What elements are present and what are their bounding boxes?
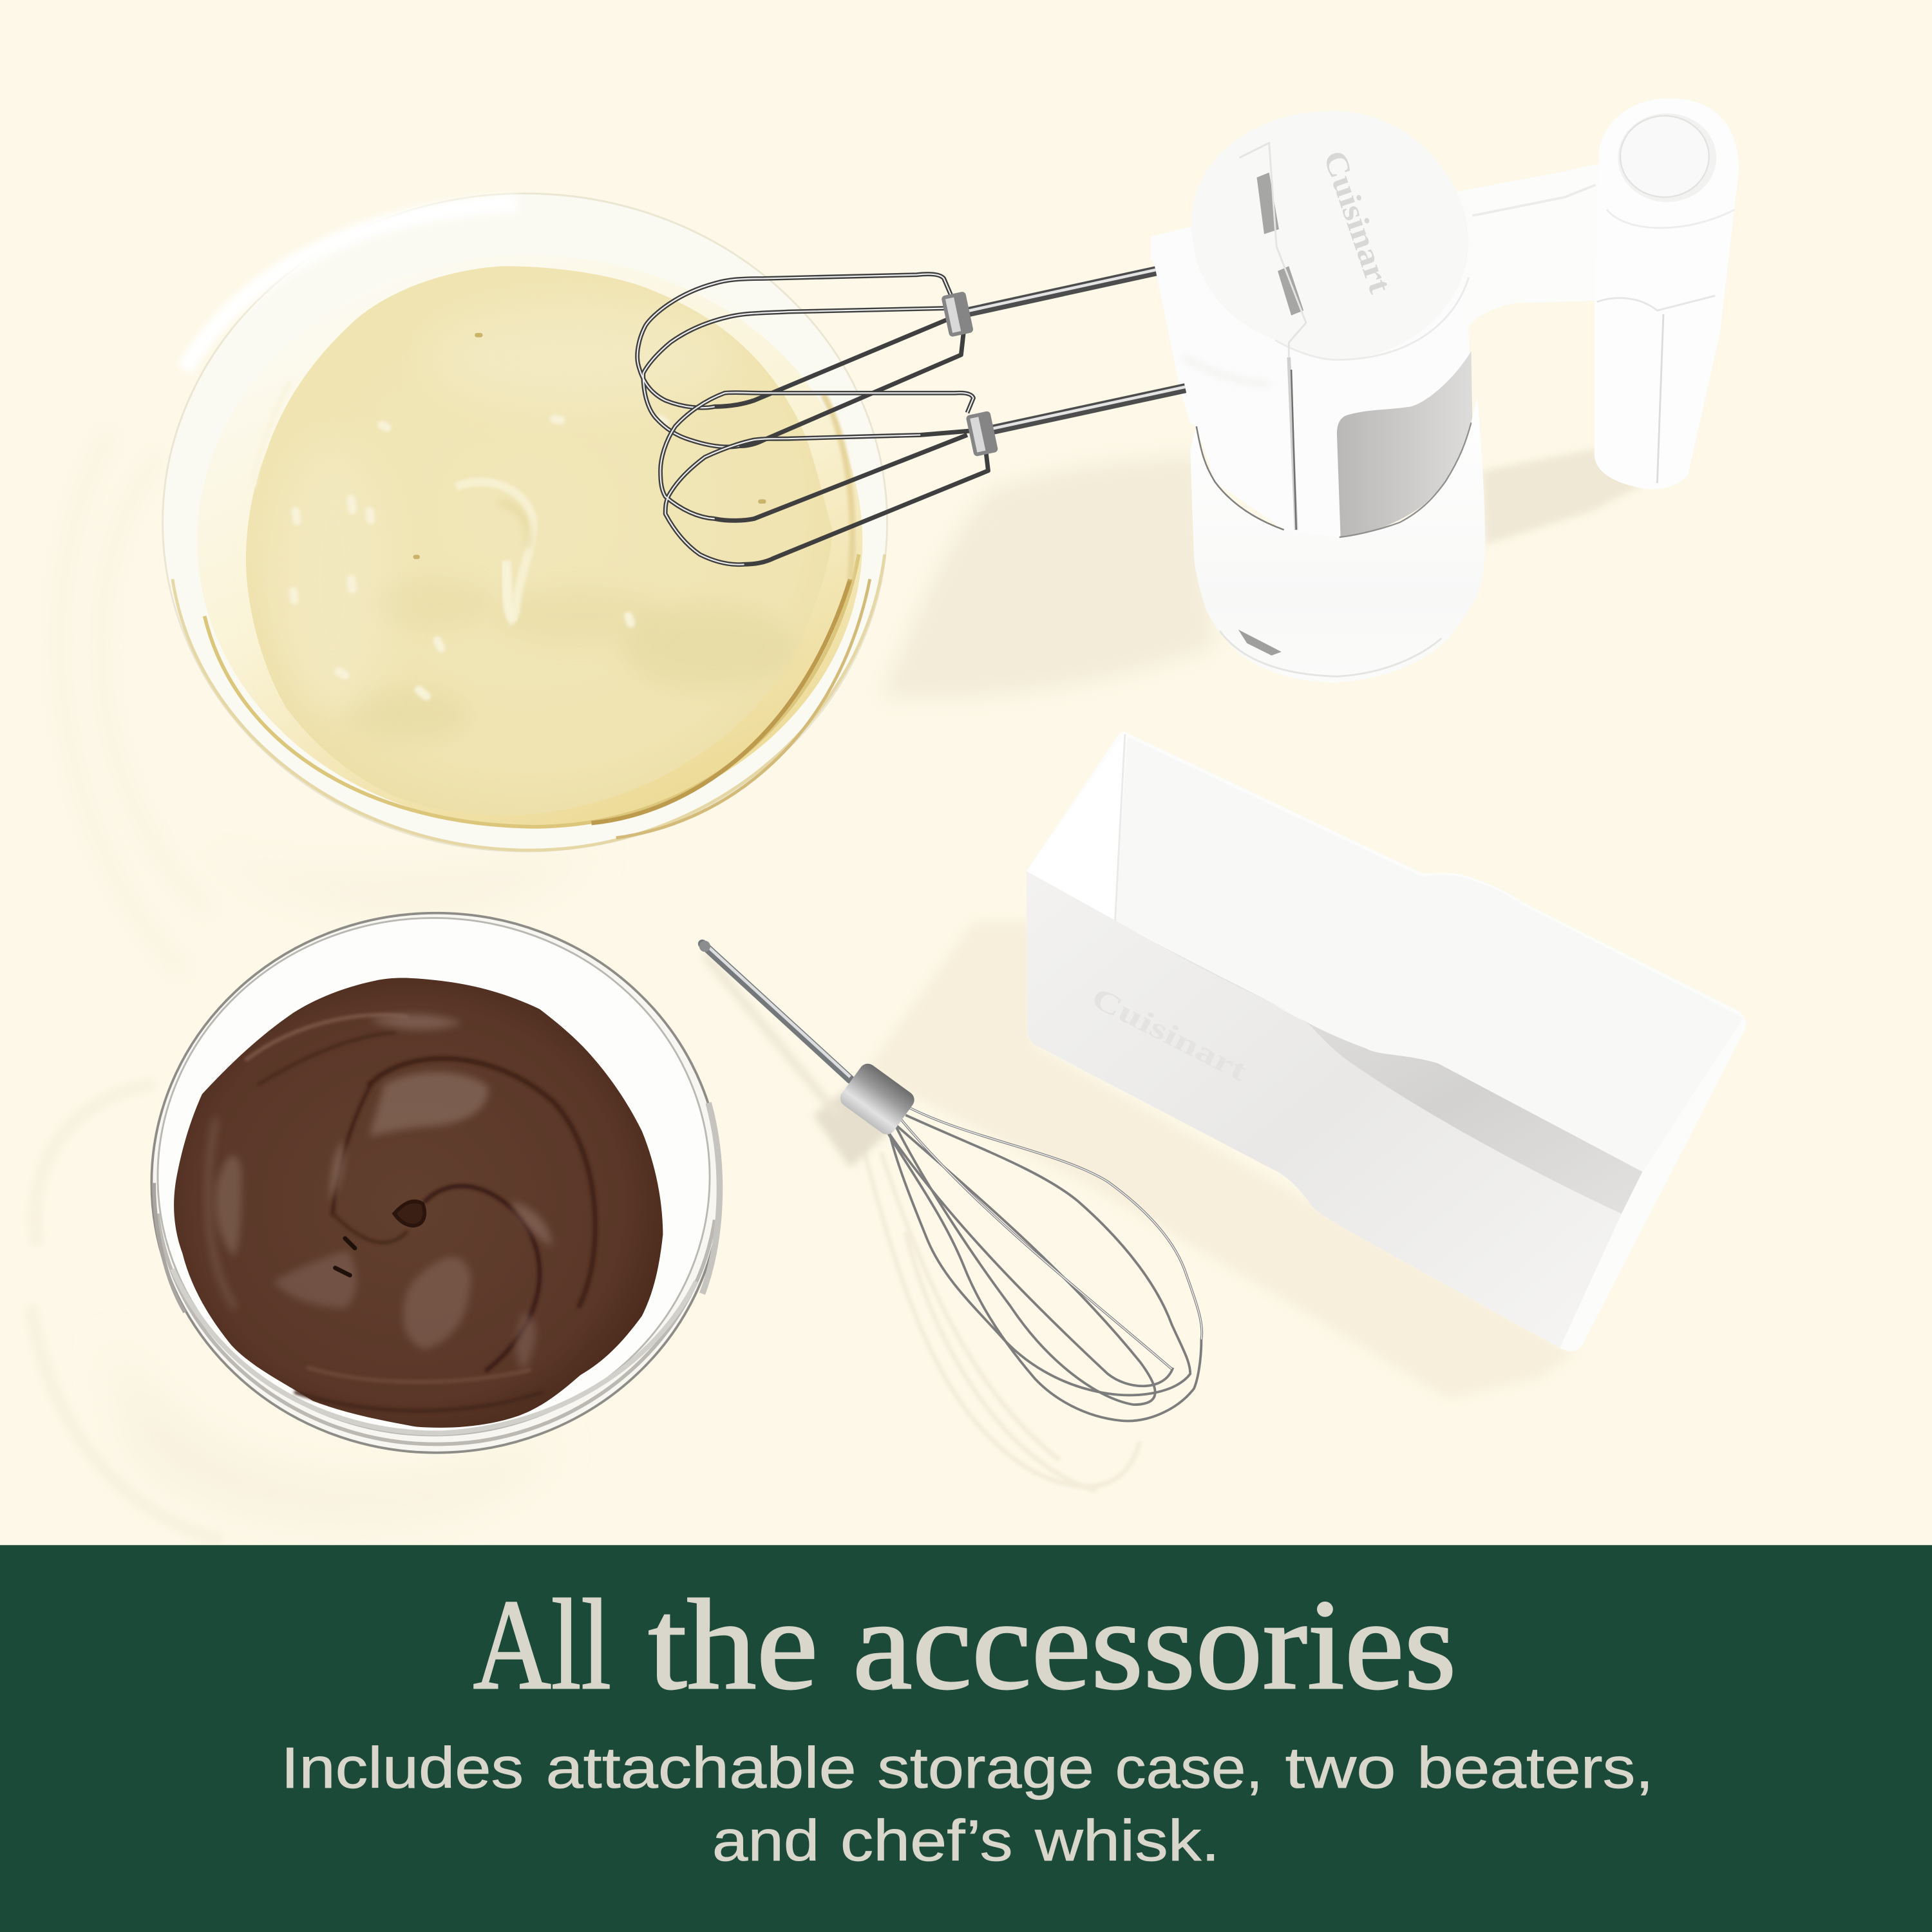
top disc bbox=[1191, 111, 1469, 360]
handle grip bbox=[1595, 99, 1739, 489]
chocolate swirls bbox=[208, 1015, 595, 1411]
inner glass well bbox=[197, 255, 862, 827]
description line 1: two bbox=[1285, 1736, 1396, 1801]
brand logo: Cuisinart bbox=[1316, 146, 1398, 298]
description line 1: beaters, bbox=[1417, 1736, 1654, 1801]
grey inner panel bbox=[1337, 351, 1472, 537]
attachment cup bbox=[1190, 397, 1485, 683]
description line 2: and bbox=[712, 1809, 819, 1873]
description line 1: attachable bbox=[546, 1736, 857, 1801]
amber ring lines bbox=[205, 554, 859, 827]
description line 2: whisk. bbox=[1034, 1809, 1220, 1873]
hand mixer bbox=[638, 99, 1739, 683]
glass bowl bbox=[151, 913, 721, 1453]
front face bbox=[1027, 871, 1622, 1348]
mixer body casing bbox=[1151, 227, 1471, 537]
interior side wall bbox=[1027, 732, 1125, 920]
chocolate surface bbox=[174, 978, 663, 1428]
whisk collar bbox=[837, 1060, 918, 1138]
body seam bbox=[1289, 357, 1296, 530]
glass bowl rim bbox=[163, 193, 887, 851]
handle arm bbox=[1454, 160, 1627, 333]
description line 2 bbox=[712, 1809, 1220, 1873]
batter swirl and tones bbox=[252, 308, 795, 742]
disc slots bbox=[1257, 173, 1279, 234]
bowl of chocolate batter bbox=[151, 913, 721, 1453]
description line 1: storage bbox=[877, 1736, 1094, 1801]
title: accessories bbox=[853, 1573, 1456, 1716]
footer band bbox=[0, 1545, 1932, 1932]
groove shadow bbox=[1151, 940, 1642, 1214]
storage case bbox=[1027, 732, 1746, 1351]
whisk shadow bbox=[862, 1146, 1140, 1491]
batter surface bbox=[246, 266, 833, 815]
whisk shaft bbox=[703, 944, 850, 1079]
whisk wires bbox=[885, 1108, 1202, 1421]
description line 2: chef’s bbox=[840, 1809, 1013, 1873]
bowl of yellow batter bbox=[163, 193, 887, 851]
title bbox=[473, 1573, 1456, 1716]
lower beater bbox=[661, 387, 1186, 565]
title: the bbox=[648, 1573, 818, 1716]
power button bbox=[1618, 113, 1716, 202]
description line 1: case, bbox=[1115, 1736, 1263, 1801]
embossed logo: Cuisinart bbox=[1086, 981, 1253, 1088]
case outline and right facet bbox=[1027, 732, 1746, 1351]
upper beater bbox=[638, 270, 1156, 447]
soft shadows on the surface bbox=[31, 431, 1646, 1540]
description line 1 bbox=[281, 1736, 1654, 1801]
chocolate creases bbox=[335, 1238, 355, 1275]
description line 1: Includes bbox=[281, 1736, 524, 1801]
chocolate highlights bbox=[215, 1014, 552, 1370]
title: All bbox=[473, 1573, 611, 1716]
interior back wall bbox=[1115, 737, 1743, 1172]
cup vent bbox=[1238, 630, 1282, 656]
whisk bbox=[699, 941, 1202, 1491]
